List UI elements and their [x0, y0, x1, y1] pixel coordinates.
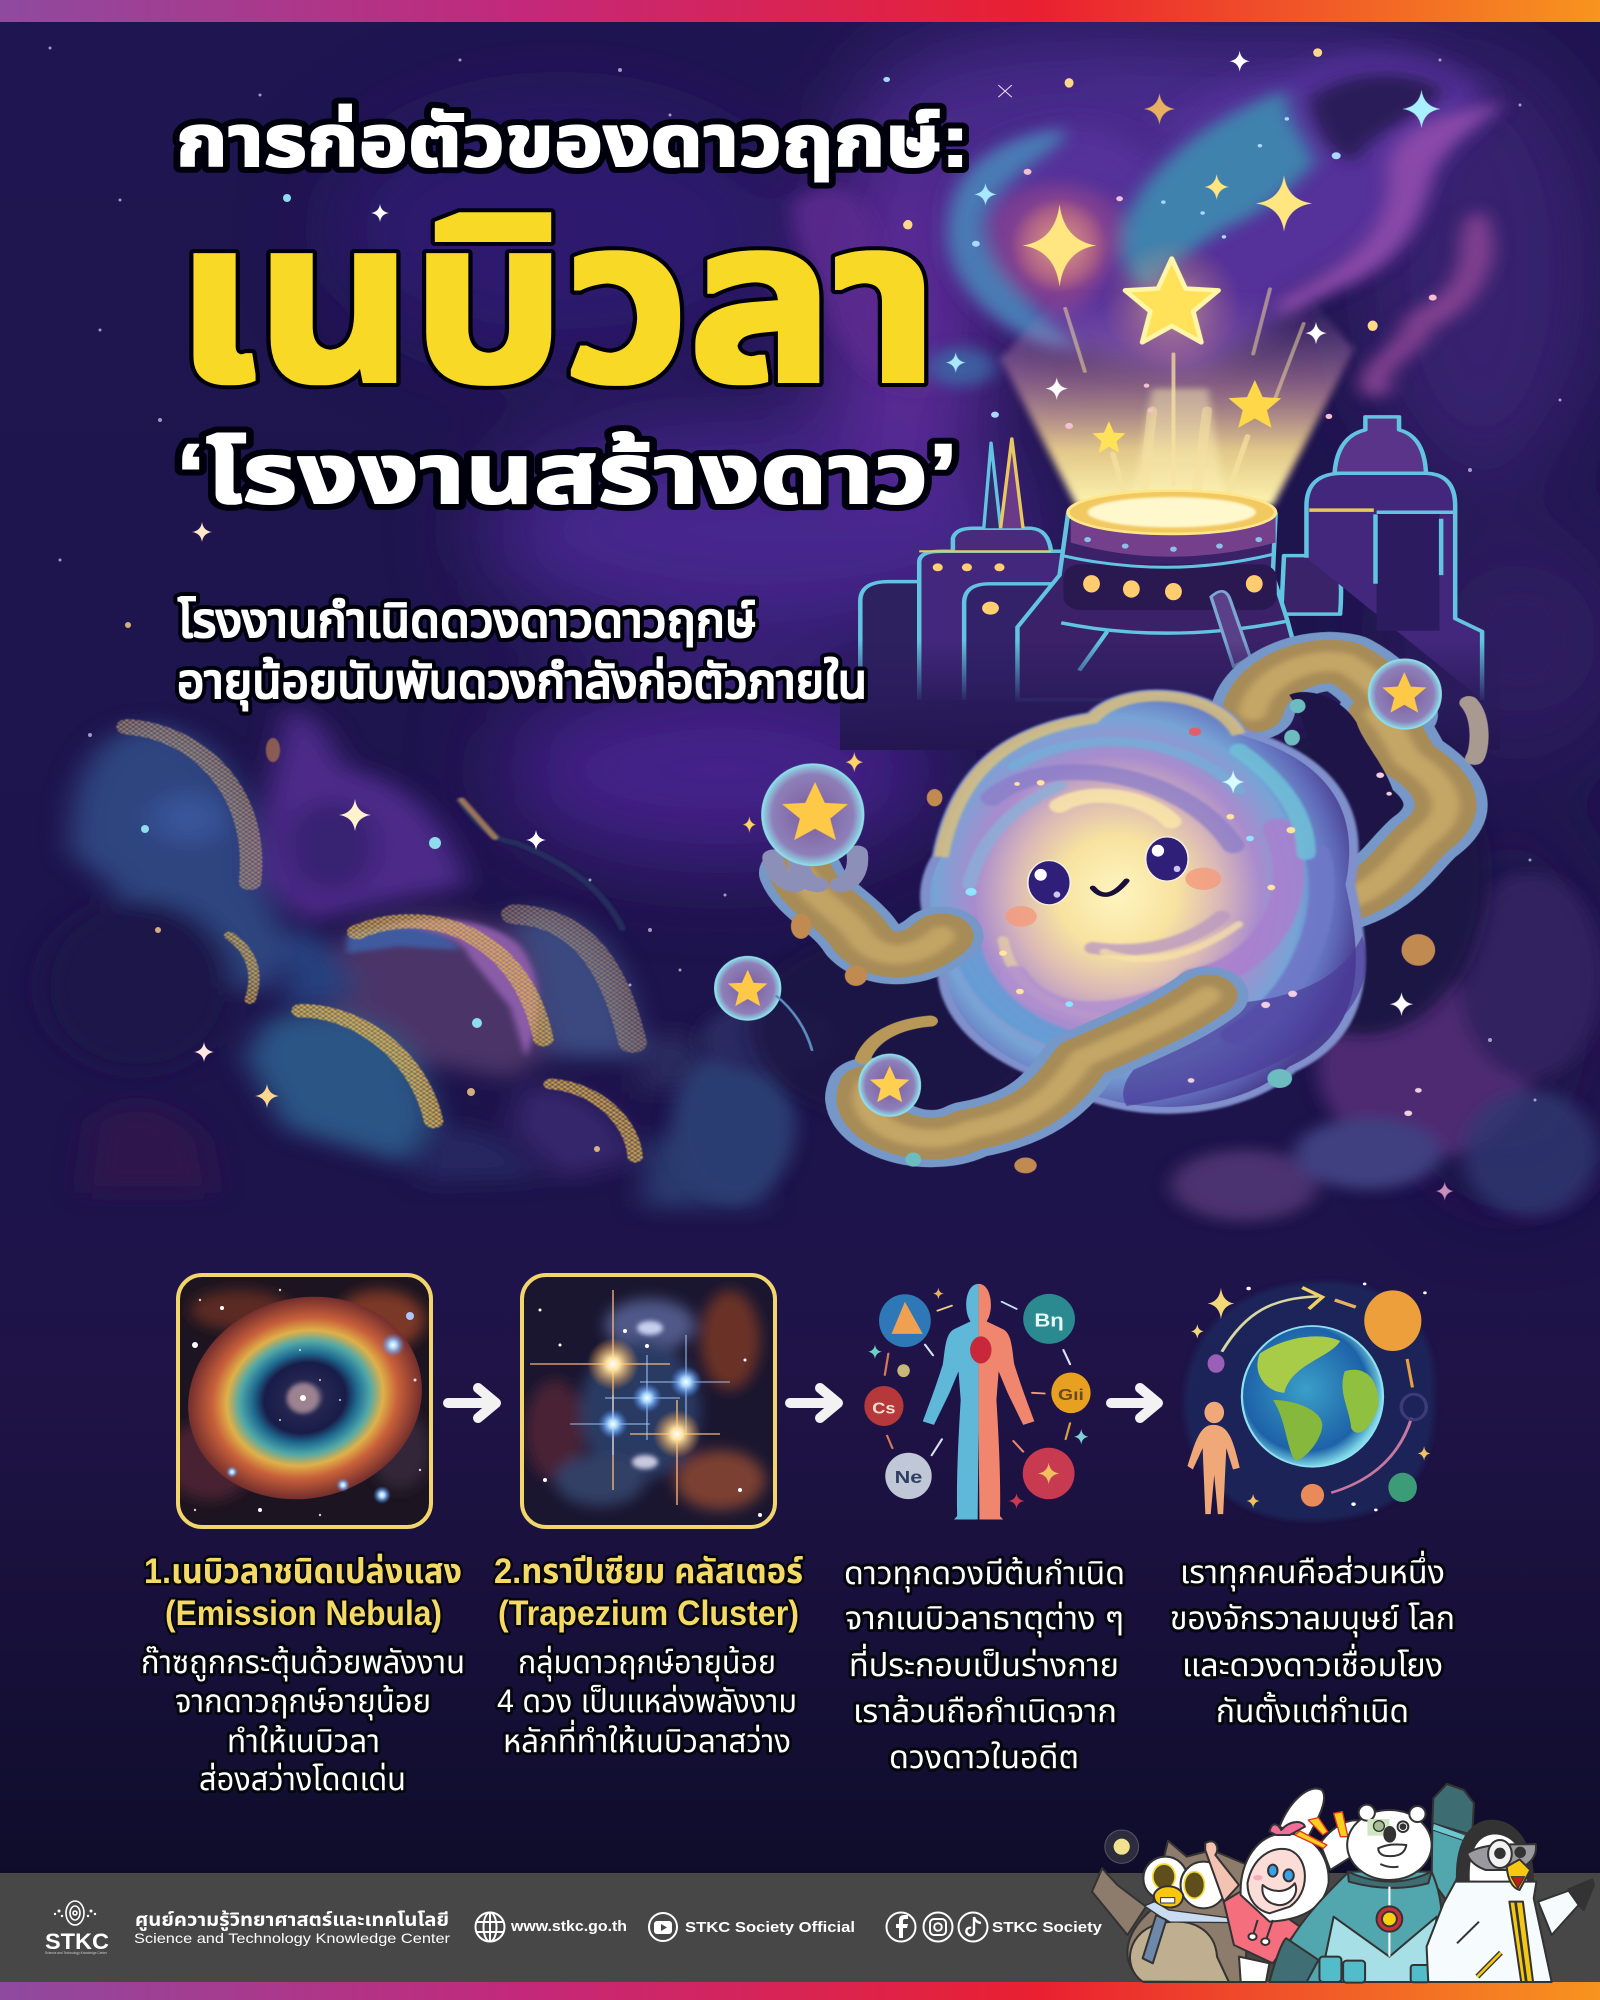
bottom gradient bar [0, 1982, 1600, 2000]
icon: person [1187, 1402, 1240, 1514]
icon: earth [1242, 1326, 1383, 1467]
panel: human body with elements [864, 1284, 1091, 1520]
caption 1: ทำให้เนบิวลา [227, 1723, 380, 1759]
stars rising from factory [883, 48, 1441, 453]
caption 4: และดวงดาวเชื่อมโยง [1182, 1643, 1443, 1683]
arm: right golden arm [1194, 662, 1479, 995]
caption 2: หลักที่ทำให้เนบิวลาสว่าง [503, 1719, 791, 1759]
nebula smoke above factory [792, 48, 1506, 700]
caption 2 [494, 1552, 803, 1759]
icon: light bulb [1105, 1830, 1139, 1863]
bear mascot [1269, 1784, 1474, 1983]
caption 1 [141, 1552, 465, 1797]
arm: golden arm crossing front [773, 853, 1208, 1139]
caption 4: กันตั้งแต่กำเนิด [1216, 1691, 1409, 1729]
panel: trapezium cluster image [522, 1275, 775, 1527]
center name: Science and Technology Knowledge Center [134, 1930, 450, 1946]
youtube: STKC Society Official [685, 1919, 855, 1936]
mascots group [1092, 1784, 1594, 1983]
logo: STKC [45, 1901, 109, 1955]
element bubbles [864, 1288, 1091, 1509]
caption 4: เราทุกคนคือส่วนหนึ่ง [1180, 1550, 1445, 1591]
bubbles with stars held by mascot [715, 659, 1454, 1201]
light beam [1001, 254, 1354, 506]
element bubbles: Bη [1034, 1311, 1064, 1331]
arrow 1 [448, 1388, 496, 1418]
clouds: right nebula clouds [672, 873, 1600, 1221]
caption 3 [844, 1555, 1125, 1775]
bunny mascot [1205, 1789, 1367, 1982]
caption 1: จากดาวฤกษ์อายุน้อย [175, 1683, 431, 1720]
caption 4 [1170, 1550, 1455, 1729]
panel: emission nebula image [165, 1271, 445, 1527]
factory: central furnace [1017, 491, 1309, 700]
penguin mascot [1427, 1821, 1594, 1982]
owl mascot [1092, 1841, 1247, 1982]
planets and orbit arrow [1191, 1282, 1430, 1511]
website: www.stkc.go.th [510, 1918, 627, 1935]
element bubbles: Ne [895, 1468, 922, 1487]
caption 1: (Emission Nebula) [165, 1594, 442, 1633]
website [476, 1912, 627, 1942]
icon: human figure [923, 1284, 1034, 1520]
logo: STKC: STKC [45, 1929, 109, 1954]
element bubbles: Cs [872, 1399, 896, 1417]
factory: right tank [1281, 417, 1482, 700]
subtitle: โรงงานกำเนิดดวงดาวดาวฤกษ์ [178, 595, 756, 648]
element bubbles: Gıi [1058, 1386, 1084, 1403]
caption 4: ของจักรวาลมนุษย์ โลก [1170, 1600, 1455, 1637]
subtitle: อายุน้อยนับพันดวงกำลังก่อตัวภายใน [177, 656, 867, 711]
footer band [0, 1873, 1600, 1982]
arrow 2 [790, 1388, 838, 1418]
center name [134, 1909, 450, 1946]
caption 3: จากเนบิวลาธาตุต่าง ๆ [845, 1600, 1124, 1637]
swirl body [930, 696, 1366, 1107]
factory: left buildings [860, 439, 1085, 700]
title line 1: การก่อตัวของดาวฤกษ์: [176, 102, 969, 182]
social icons [886, 1912, 1103, 1942]
clouds: left nebula clouds [41, 707, 765, 1207]
mascot face [965, 727, 1295, 1007]
panel: earth and human connected [1184, 1281, 1434, 1521]
caption 2: (Trapezium Cluster) [498, 1594, 799, 1633]
fade under factory [840, 640, 1500, 750]
title line 2: nebula: เนบิวลา [176, 175, 938, 428]
caption 1: 1.เนบิวลาชนิดเปล่งแสง [144, 1552, 462, 1591]
title line 3: ‘โรงงานสร้างดาว’ [176, 427, 958, 521]
caption 3: เราล้วนถือกำเนิดจาก [853, 1693, 1117, 1729]
caption 1: ก๊าซถูกกระตุ้นด้วยพลังงาน [141, 1644, 465, 1682]
caption 2: 2.ทราปีเซียม คลัสเตอร์ [494, 1552, 803, 1591]
caption 3: ดวงดาวในอดีต [889, 1739, 1079, 1775]
caption 1: ส่องสว่างโดดเด่น [199, 1761, 406, 1797]
top gradient bar [0, 0, 1600, 22]
nebula mascot: swirling galaxy character [715, 659, 1486, 1201]
caption 2: 4 ดวง เป็นแหล่งพลังงาม [497, 1683, 797, 1719]
scattered stars [48, 46, 1562, 1152]
caption 3: ดาวทุกดวงมีต้นกำเนิด [844, 1555, 1125, 1592]
arrow 3 [1111, 1388, 1158, 1418]
caption 3: ที่ประกอบเป็นร่างกาย [849, 1643, 1119, 1683]
logo: STKC: Science and Technology Knowledge Center [45, 1950, 108, 1955]
social icons: STKC Society [992, 1919, 1103, 1936]
center name: ศูนย์ความรู้วิทยาศาสตร์และเทคโนโลยี [135, 1909, 449, 1931]
caption 2: กลุ่มดาวฤกษ์อายุน้อย [518, 1644, 776, 1681]
youtube [649, 1913, 855, 1941]
subtitle [177, 595, 867, 711]
